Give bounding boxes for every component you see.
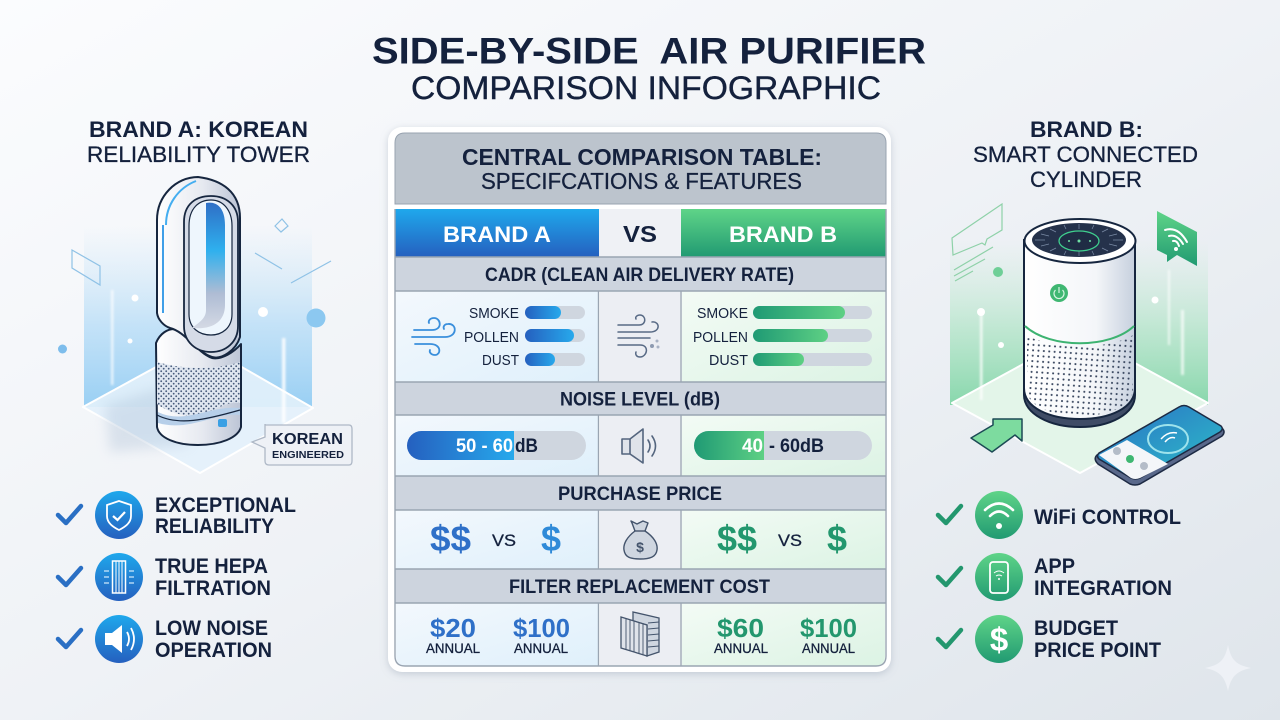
CADR bars: Brand B: DUST [709,353,748,369]
column header: Brand B [681,209,886,257]
feature: True HEPA Filtration [58,553,271,601]
price: Brand A: $ [541,518,561,559]
row heading: Purchase price: PURCHASE PRICE [558,484,722,505]
filter cost: Brand A: ANNUAL [514,641,568,656]
price: Brand A: VS [492,531,516,550]
title [372,30,926,106]
CADR bars: Brand A [464,306,585,369]
CADR bars: Brand A: POLLEN [464,330,519,346]
CADR bars: Brand B: POLLEN [693,330,748,346]
row heading: CADR [395,257,886,291]
feature: WiFi Control [938,491,1181,539]
illustration: phone [1095,406,1224,485]
filter cost: Brand A: $100 [513,615,570,643]
column header: VS: VS [623,221,657,247]
CADR bars: Brand A: SMOKE [469,306,519,322]
noise bar: Brand A: dB [515,436,538,457]
icon: filters [621,612,659,656]
table heading: CENTRAL COMPARISON TABLE: [462,144,822,170]
feature: Low Noise Operation [58,615,272,663]
table heading [395,133,886,204]
feature: App Integration [938,553,1172,601]
feature: Budget Price Point: $ [990,621,1008,658]
price: Brand A [430,518,561,559]
filter cost: Brand A [426,615,570,656]
feature: True HEPA Filtration: FILTRATION [155,577,271,600]
price: Brand B: VS [778,531,802,550]
feature: Exceptional Reliability: EXCEPTIONAL [155,494,296,517]
icon: blue wind [412,318,455,355]
CADR bars: Brand B [693,306,872,369]
table heading: SPECIFCATIONS & FEATURES [481,168,802,194]
icon: money bag: $ [636,539,644,555]
column header: VS [599,209,681,257]
heading: Brand B [973,117,1198,192]
price: Brand B [717,518,847,559]
filter cost: Brand B: $100 [800,615,857,643]
callout: Korean Engineered [252,424,352,465]
noise bar: Brand B [694,431,872,460]
feature: Low Noise Operation: LOW NOISE [155,617,268,640]
feature: Exceptional Reliability [58,491,296,539]
feature: Low Noise Operation: OPERATION [155,639,272,662]
row heading: CADR: CADR (CLEAN AIR DELIVERY RATE) [485,265,794,286]
row heading: Filter replacement: FILTER REPLACEMENT COST [509,577,770,598]
icon: speaker [622,429,656,463]
price: Brand B: $$ [717,518,757,559]
row heading: Noise [395,382,886,415]
price: Brand B: $ [827,518,847,559]
icon: wind with dust [618,315,660,357]
column header: Brand B: BRAND B [729,222,837,247]
illustration: cylinder purifier [950,204,1208,473]
feature: Budget Price Point [938,615,1161,663]
feature: App Integration: INTEGRATION [1034,577,1172,600]
heading: Brand A [87,117,310,167]
callout: Korean Engineered: ENGINEERED [272,449,344,461]
heading: Brand A: BRAND A: KOREAN [89,117,308,142]
panel: Brand A [58,117,352,663]
feature: Exceptional Reliability: RELIABILITY [155,515,274,538]
icon: money bag [624,521,657,559]
title: COMPARISON INFOGRAPHIC [411,70,881,106]
icon: wifi message bubble [1157,211,1197,266]
title: SIDE-BY-SIDE AIR PURIFIER [372,30,926,72]
filter cost: Brand B [714,615,857,656]
feature: App Integration: APP [1034,555,1075,578]
feature: WiFi Control: WiFi CONTROL [1034,506,1181,529]
panel: Brand B [938,117,1224,663]
row heading: Noise: NOISE LEVEL (dB) [560,390,720,410]
noise bar: Brand A: 50 - 60 [456,436,513,457]
filter cost: Brand B: ANNUAL [714,641,768,656]
price: Brand A: $$ [430,518,471,559]
CADR bars: Brand B: SMOKE [697,306,748,322]
noise bar: Brand B: - 60dB [769,436,824,457]
feature: Budget Price Point: BUDGET [1034,617,1118,640]
feature: True HEPA Filtration: TRUE HEPA [155,555,268,578]
filter cost: Brand A: $20 [430,615,476,643]
CADR bars: Brand A: DUST [482,353,519,369]
row heading: Purchase price [395,476,886,510]
filter cost: Brand A: ANNUAL [426,641,480,656]
row heading: Filter replacement [395,569,886,603]
icon: sparkle [1205,645,1251,691]
filter cost: Brand B: $60 [717,615,764,643]
icon: arrow [971,419,1022,452]
filter cost: Brand B: ANNUAL [802,641,855,656]
heading: Brand B: BRAND B: [1030,117,1143,142]
illustration: tower purifier [58,177,331,473]
column header: Brand A [395,209,599,257]
callout: Korean Engineered: KOREAN [272,431,343,448]
panel: comparison table [388,127,891,672]
feature: Budget Price Point: PRICE POINT [1034,639,1161,662]
noise bar: Brand A [407,431,586,460]
column header: Brand A: BRAND A [443,222,551,247]
heading: Brand A: RELIABILITY TOWER [87,142,310,167]
heading: Brand B: SMART CONNECTED [973,142,1198,167]
heading: Brand B: CYLINDER [1030,167,1142,192]
noise bar: Brand B: 40 [742,436,763,457]
